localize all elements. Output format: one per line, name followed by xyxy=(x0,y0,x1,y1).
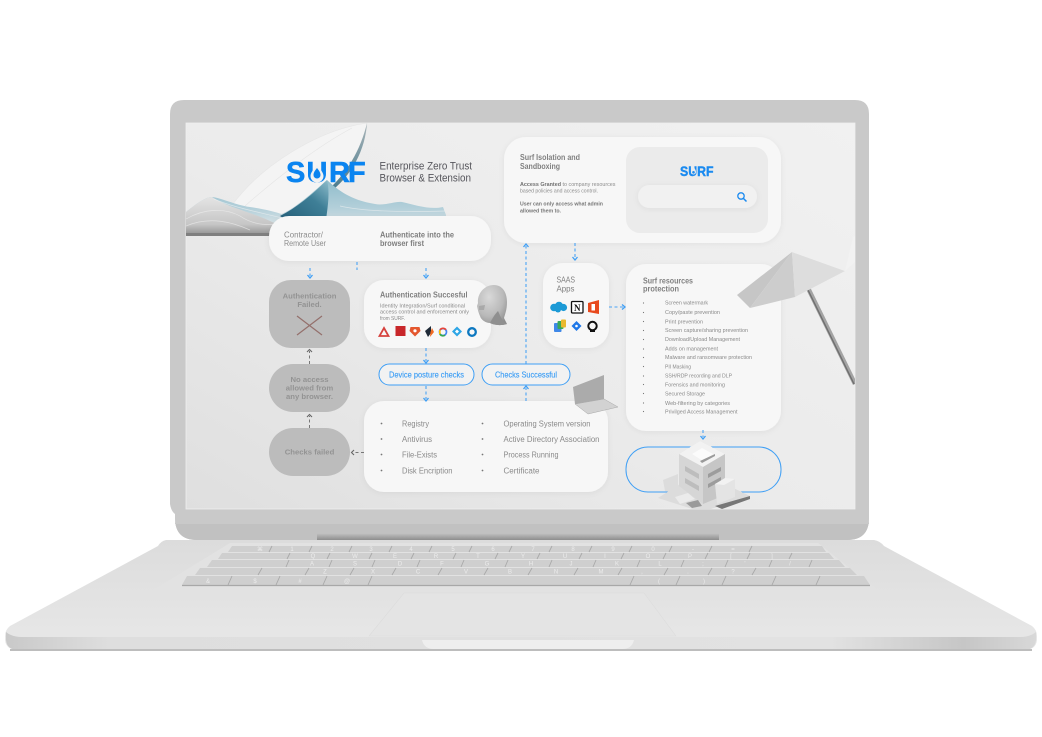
panel: surf resources protection: Adds on management xyxy=(665,346,718,352)
panel: authentication failed: Failed. xyxy=(297,300,322,309)
screen background xyxy=(186,123,855,509)
keyboard: ] xyxy=(771,554,773,560)
keyboard: - xyxy=(692,547,694,553)
panel: no access xyxy=(269,364,350,412)
panel: no access: any browser. xyxy=(286,392,333,401)
keyboard: $ xyxy=(253,579,257,585)
keyboard: A xyxy=(310,562,314,568)
keyboard: W xyxy=(352,554,358,560)
panel: surf resources protection: Copy/paste prevention xyxy=(665,310,720,316)
panel: posture check list: Antivirus xyxy=(402,435,432,444)
keyboard: D xyxy=(398,562,403,568)
panel: contractor and authenticate xyxy=(269,216,491,261)
laptop lid xyxy=(170,100,869,540)
panel: authentication successful xyxy=(364,280,491,348)
panel: surf resources protection: Malware and ransomware protection xyxy=(665,355,752,361)
keyboard: 3 xyxy=(369,547,373,553)
panel: checks failed: Checks failed xyxy=(285,448,335,456)
keyboard: X xyxy=(371,570,375,576)
keyboard: [ xyxy=(730,554,732,560)
panel: authentication failed: Authentication xyxy=(283,292,337,300)
panel: isolation and sandboxing: allowed them to. xyxy=(520,208,561,214)
panel: authentication successful: access control and enforcement only xyxy=(380,310,469,316)
keyboard: @ xyxy=(344,579,350,585)
keyboard: E xyxy=(393,554,397,560)
keyboard: S xyxy=(353,562,357,568)
keyboard: / xyxy=(789,562,791,568)
keyboard: B xyxy=(508,570,512,576)
icon: small laptop xyxy=(573,375,618,414)
panel: authentication successful: Authentication Succesful xyxy=(380,290,468,300)
panel: building pill xyxy=(626,447,781,492)
pill: checks successful xyxy=(482,364,570,385)
title: Enterprise Zero Trust xyxy=(380,160,472,172)
panel: surf resources protection: Screen watermark xyxy=(665,300,708,306)
panel: surf resources protection: Secured Storage xyxy=(665,392,705,398)
keyboard: = xyxy=(731,547,735,553)
panel: contractor and authenticate: browser first xyxy=(380,239,424,248)
keyboard: U xyxy=(563,554,567,560)
icon: 3D head xyxy=(477,285,507,325)
panel: SAAS apps: Apps xyxy=(556,284,574,294)
keyboard: ; xyxy=(702,562,704,568)
title: Browser & Extension xyxy=(380,172,471,184)
keyboard: & xyxy=(206,579,210,585)
icon: beach umbrella xyxy=(737,252,855,385)
keyboard xyxy=(150,543,880,592)
keyboard: 9 xyxy=(611,547,615,553)
pill: checks successful: Checks Successful xyxy=(495,370,557,380)
keyboard: ? xyxy=(731,570,735,576)
panel: surf resources protection: Forensics and monitoring xyxy=(665,382,725,388)
title xyxy=(380,160,472,184)
panel: SAAS apps xyxy=(543,263,609,348)
panel: SAAS apps: SAAS xyxy=(556,276,575,284)
icon: cross xyxy=(297,316,322,335)
panel: surf resources protection: Print prevention xyxy=(665,320,703,326)
keyboard: 8 xyxy=(571,547,575,553)
panel: isolation and sandboxing: Sandboxing xyxy=(520,162,560,171)
browser mockup xyxy=(626,147,768,233)
panel: posture check list: Operating System version xyxy=(504,420,590,428)
panel: surf resources protection: Privilged Access Management xyxy=(665,410,738,416)
keyboard: , xyxy=(641,570,643,576)
panel: surf resources protection: Surf resources xyxy=(643,276,693,286)
pill: device posture checks: Device posture checks xyxy=(389,370,464,380)
keyboard: 2 xyxy=(330,547,334,553)
panel: surf resources protection: PII Masking xyxy=(665,364,691,370)
icons: identity providers xyxy=(380,326,476,337)
keyboard: ⌘ xyxy=(257,546,263,553)
panel: posture check list: Registry xyxy=(402,420,429,428)
keyboard: N xyxy=(554,570,558,576)
keyboard: M xyxy=(598,570,604,576)
panel: posture check list: Disk Encription xyxy=(402,466,452,476)
panel: contractor and authenticate: Remote User xyxy=(284,239,326,248)
icons: SaaS logos: N xyxy=(574,303,581,313)
panel: surf resources protection: Web-filtering by categories xyxy=(665,401,730,407)
keyboard: R xyxy=(434,554,439,560)
panel: posture check list: Process Running xyxy=(504,450,558,460)
panel: surf resources protection: protection xyxy=(643,284,679,294)
keyboard: ) xyxy=(703,579,705,585)
artwork: surfboard and wave xyxy=(186,123,446,236)
panel: no access: allowed from xyxy=(286,384,333,392)
pill: device posture checks xyxy=(379,364,474,385)
panel: authentication successful: Identity Integration/Surf conditional xyxy=(380,304,465,310)
keyboard: ' xyxy=(744,562,746,568)
panel: posture check list: Certificate xyxy=(504,466,540,476)
keyboard: L xyxy=(658,562,662,568)
panel: isolation and sandboxing xyxy=(504,137,781,243)
keyboard: Z xyxy=(323,570,327,576)
keyboard: C xyxy=(416,570,421,576)
panel: isolation and sandboxing: Access Granted to company resources xyxy=(520,182,616,188)
arrows: grey failure connectors xyxy=(307,350,364,455)
panel: authentication successful: from SURF. xyxy=(380,316,405,322)
panel: authentication failed xyxy=(269,280,350,348)
panel: surf resources protection: Screen capture/sharing prevention xyxy=(665,328,748,334)
panel: isolation and sandboxing: User can only access what admin xyxy=(520,202,603,208)
panel: isolation and sandboxing: Surf Isolation and xyxy=(520,153,580,162)
browser mockup: SURF xyxy=(680,163,714,179)
keyboard: ( xyxy=(658,579,660,585)
keyboard: I xyxy=(604,554,606,560)
arrows: blue dashed flow connectors xyxy=(308,243,706,439)
keyboard: J xyxy=(570,562,572,568)
panel: surf resources protection: Download/Upload Management xyxy=(665,337,740,343)
panel: no access: No access xyxy=(290,375,329,384)
icon: isometric building xyxy=(658,446,750,509)
keyboard: 7 xyxy=(531,547,535,553)
keyboard: F xyxy=(440,562,444,568)
keyboard: . xyxy=(687,570,689,576)
hinge xyxy=(317,533,719,540)
panel: checks failed xyxy=(269,428,350,476)
panel: contractor and authenticate: Contractor/ xyxy=(284,230,324,240)
keyboard: # xyxy=(298,579,302,585)
keyboard: 6 xyxy=(491,547,495,553)
panel: posture check list: Active Directory Association xyxy=(504,435,600,444)
keyboard: G xyxy=(485,562,490,568)
logo: SURF: SURF xyxy=(286,157,366,189)
panel: posture check list xyxy=(364,401,608,492)
keyboard: H xyxy=(529,562,533,568)
keyboard: V xyxy=(464,570,468,576)
panel: isolation and sandboxing: based policies and access control. xyxy=(520,188,598,194)
keyboard: 1 xyxy=(290,547,294,553)
panel: surf resources protection: SSH/RDP recording and DLP xyxy=(665,374,732,380)
keyboard: 0 xyxy=(651,547,655,553)
keyboard: K xyxy=(615,562,619,568)
panel: posture check list: File-Exists xyxy=(402,450,437,460)
laptop base xyxy=(5,540,1037,651)
keyboard: Q xyxy=(311,554,316,560)
keyboard: 5 xyxy=(451,547,455,553)
keyboard: Y xyxy=(521,554,525,560)
keyboard: T xyxy=(476,554,480,560)
trackpad xyxy=(369,593,676,636)
panel: contractor and authenticate: Authenticate into the xyxy=(380,230,454,240)
panel: surf resources protection xyxy=(626,264,781,431)
keyboard: O xyxy=(646,554,651,560)
keyboard: P xyxy=(688,554,692,560)
keyboard: 4 xyxy=(409,547,413,553)
